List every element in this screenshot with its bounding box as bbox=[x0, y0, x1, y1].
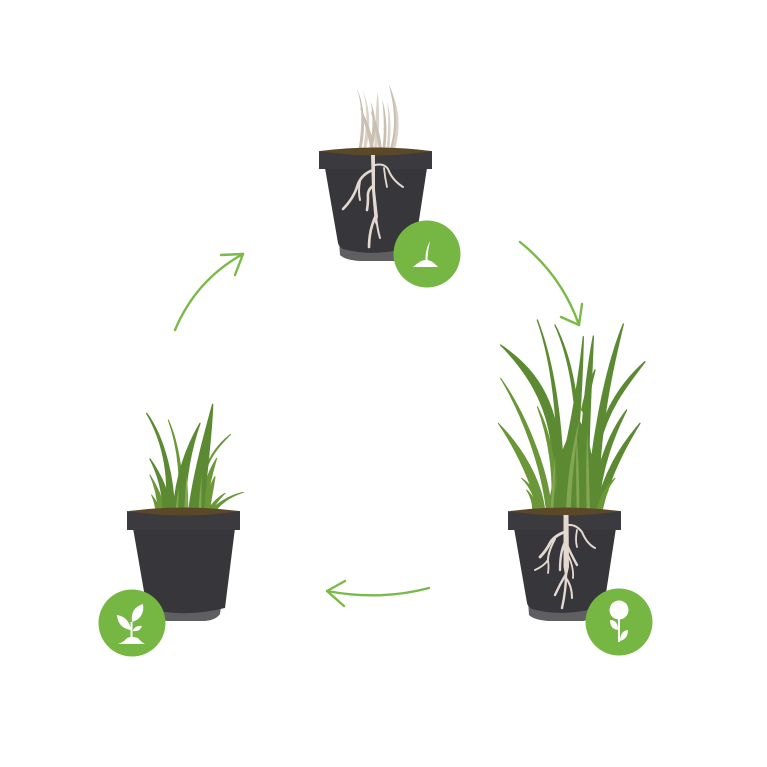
pot soil bbox=[129, 508, 239, 518]
arrow: top pot to large plant bbox=[520, 242, 582, 325]
pot body bbox=[133, 528, 235, 613]
icon: seedling badge bbox=[394, 220, 460, 288]
arrow: large plant to small plant bbox=[327, 581, 429, 606]
pot saucer bbox=[528, 600, 599, 621]
pot rim bbox=[508, 511, 621, 530]
pot saucer bbox=[339, 240, 410, 261]
large plant in pot with roots bbox=[498, 320, 652, 656]
dry plant in pot bbox=[319, 83, 460, 288]
icon: sprout badge bbox=[98, 590, 166, 656]
arrow: small plant to top pot bbox=[175, 254, 243, 330]
pot saucer bbox=[147, 600, 222, 621]
young grass blades bbox=[147, 404, 243, 516]
roots bbox=[343, 155, 403, 247]
pot rim bbox=[127, 511, 240, 530]
pot body bbox=[325, 168, 427, 253]
roots bbox=[535, 515, 595, 608]
icon: flower badge bbox=[586, 588, 652, 656]
pot rim bbox=[319, 151, 432, 169]
pot soil bbox=[510, 508, 620, 518]
pot soil bbox=[320, 148, 431, 158]
dry grass stems bbox=[357, 83, 399, 153]
pot body bbox=[514, 528, 616, 613]
small plant in pot bbox=[98, 404, 243, 656]
tall grass blades bbox=[498, 320, 645, 512]
